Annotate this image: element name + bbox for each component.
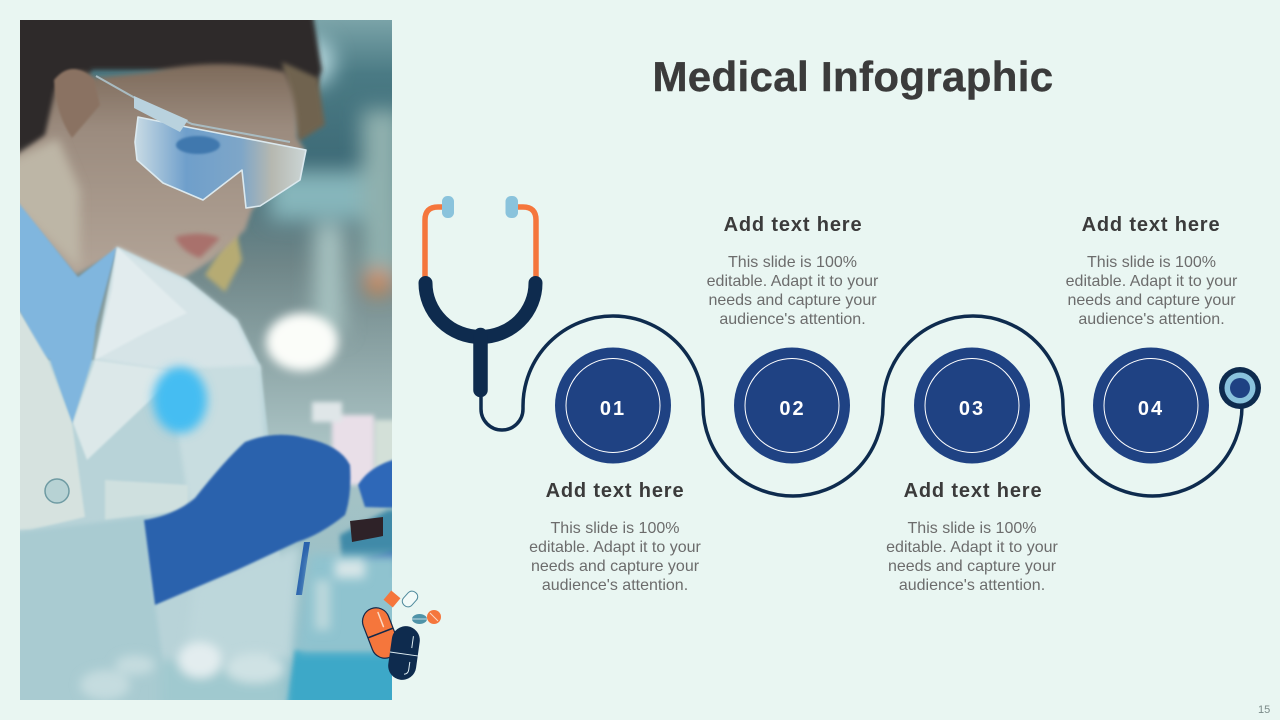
step 02 heading: Add text here [724, 214, 862, 236]
face [10, 64, 305, 280]
shirt [20, 203, 117, 424]
step 04 heading: Add text here [1082, 214, 1220, 236]
coat button [45, 479, 69, 503]
step 03 circle [914, 348, 1030, 464]
blurred glassware [80, 560, 365, 710]
coat base [20, 246, 280, 664]
step 01 heading: Add text here [546, 480, 684, 502]
step 04 text: audience's attention. [1078, 311, 1225, 328]
lens flare [153, 367, 207, 433]
step 01 circle: 01 [600, 398, 626, 420]
step 02 text: This slide is 100% [728, 254, 857, 271]
coat lapels [20, 310, 86, 530]
step 03 text [886, 520, 1058, 594]
step 02 text [707, 254, 878, 328]
hair [20, 20, 326, 155]
lamp glow [266, 313, 338, 371]
step 01 text [529, 520, 701, 594]
step 03 text: This slide is 100% [908, 520, 1036, 537]
step 03 heading: Add text here [904, 480, 1042, 502]
step 03 circle: 03 [959, 398, 985, 420]
coat chest highlight [95, 247, 260, 372]
step 01 text: This slide is 100% [551, 520, 679, 537]
step 04 text [1066, 254, 1238, 328]
pocket [105, 480, 188, 520]
step 04 circle [1093, 348, 1209, 464]
photo: scientist in lab coat and goggles [20, 20, 392, 700]
glove [144, 435, 350, 605]
page number: 15 [1258, 704, 1270, 716]
icon: pills [359, 589, 441, 682]
step 03 text: audience's attention. [899, 577, 1045, 594]
step 02 text: needs and capture your [708, 292, 877, 309]
step 01 text: editable. Adapt it to your [529, 539, 701, 556]
step 04 circle: 04 [1138, 398, 1164, 420]
flask liquid [284, 648, 392, 700]
sleeve [20, 518, 162, 700]
step 02 text: editable. Adapt it to your [707, 273, 878, 290]
step 01 circle [555, 348, 671, 464]
step 03 text: needs and capture your [888, 558, 1056, 575]
step 02 circle [734, 348, 850, 464]
step 04 text: This slide is 100% [1087, 254, 1216, 271]
step 02 text: audience's attention. [719, 311, 866, 328]
step 01 text: needs and capture your [531, 558, 699, 575]
step 04 text: needs and capture your [1067, 292, 1236, 309]
icon: chest piece [1219, 367, 1261, 409]
tube: winding line [481, 316, 1242, 496]
goggles [135, 117, 306, 208]
icon: stethoscope head [425, 196, 536, 390]
step 04 text: editable. Adapt it to your [1066, 273, 1237, 290]
step 01 text: audience's attention. [542, 577, 688, 594]
step 03 text: editable. Adapt it to your [886, 539, 1058, 556]
step 02 circle: 02 [779, 398, 806, 420]
title: Medical Infographic [652, 53, 1054, 100]
